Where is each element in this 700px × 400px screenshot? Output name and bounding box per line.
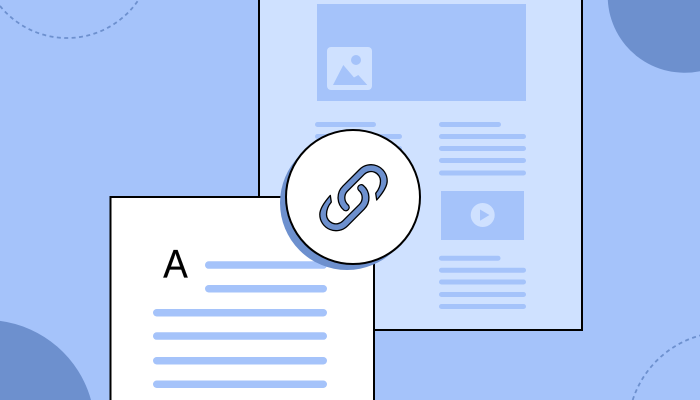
icon: chain link [320,165,387,231]
letter A: A [163,242,188,287]
text lines [153,261,327,388]
icon: image placeholder [327,47,372,90]
dashed circle: bottom right [633,336,700,400]
hero image block [317,4,526,101]
dashed circle: top left [0,0,138,38]
decorative circle: bottom left [0,321,91,400]
video block [441,191,524,240]
panel: web page document [259,0,582,330]
text lines: right column bottom [439,256,526,309]
panel: text document [110,197,374,400]
text lines: left column [315,122,402,163]
badge: link circle [280,130,420,270]
decorative circle: top right [608,0,700,73]
text lines: right column top [439,122,526,176]
icon: play button [471,203,495,227]
